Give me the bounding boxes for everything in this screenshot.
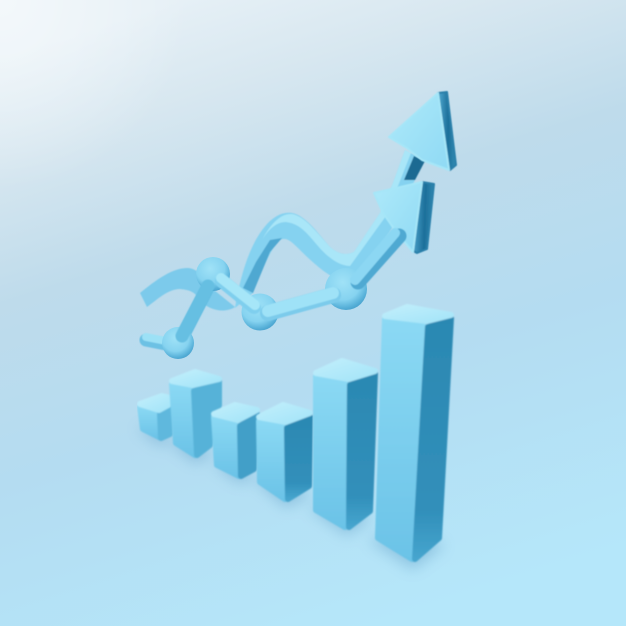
sphere 3 (242, 294, 278, 330)
back ribbon line (140, 150, 425, 311)
bar shadows (136, 428, 445, 570)
node spheres (162, 257, 367, 359)
shaft 2 (222, 281, 254, 307)
shafts over spheres (182, 233, 399, 336)
bar 5 (316, 361, 375, 527)
trend lines (140, 92, 456, 346)
sphere 1 (162, 327, 194, 359)
front arrow head (374, 182, 434, 253)
bar 4 (259, 405, 310, 499)
shaft 1 top (182, 286, 208, 336)
back arrow head (389, 92, 456, 170)
bar 6 (378, 307, 451, 559)
shaft 3 (268, 295, 333, 313)
sphere 4 (325, 268, 367, 310)
sphere 2 (196, 257, 230, 291)
front line start stub and lower shaft (146, 276, 214, 346)
bar chart (140, 307, 451, 559)
bar 3 (214, 405, 257, 476)
shaft 4 (358, 236, 399, 282)
bar 1 (140, 396, 170, 438)
bar 2 (172, 372, 219, 455)
